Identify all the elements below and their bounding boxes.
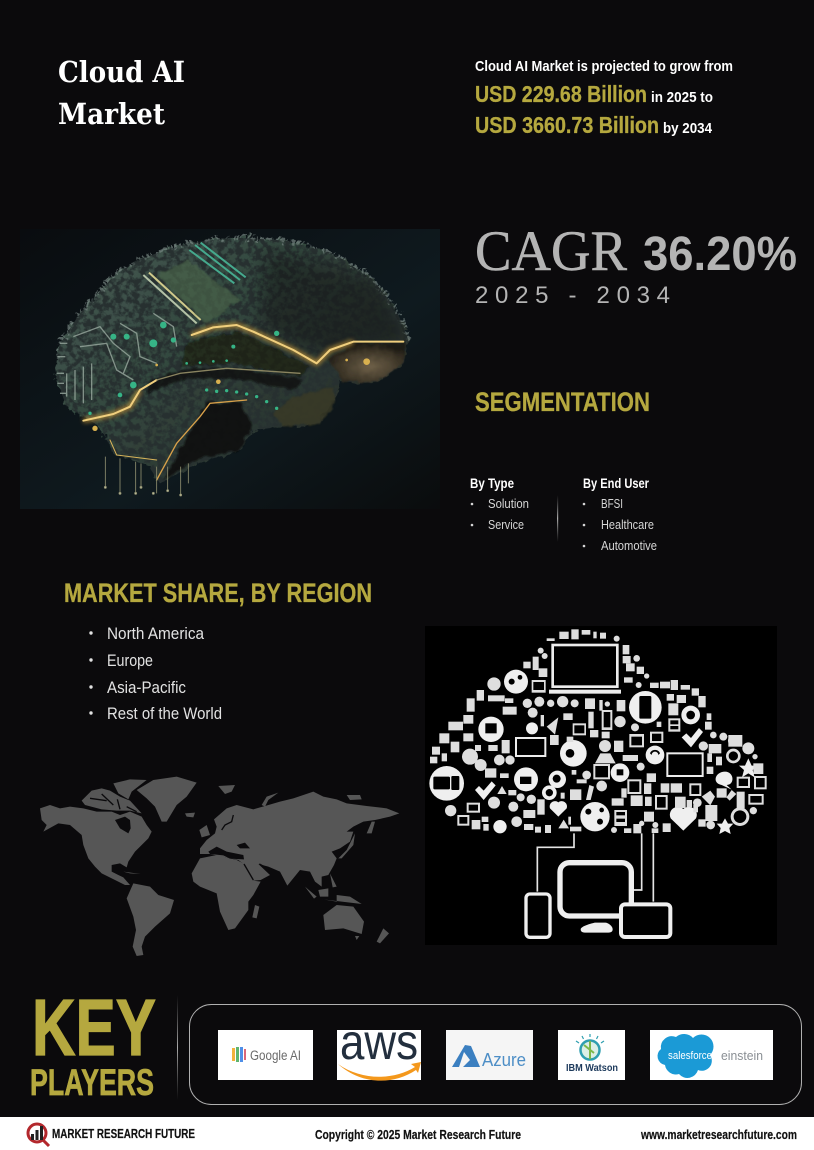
eurasia bbox=[200, 792, 399, 887]
segment column: by end user: Healthcare bbox=[601, 518, 654, 532]
market projection text: USD 229.68 Billion bbox=[475, 81, 647, 107]
europe asia africa oceania bbox=[192, 785, 399, 943]
key players heading: PLAYERS bbox=[30, 1062, 154, 1103]
baltic and red sea bbox=[222, 815, 269, 880]
logo: azure bbox=[446, 1030, 533, 1080]
footer bar bbox=[0, 1117, 814, 1150]
key players heading bbox=[30, 983, 156, 1103]
new zealand bbox=[377, 928, 389, 943]
greenland bbox=[137, 777, 197, 822]
footer brand: MARKET RESEARCH FUTURE bbox=[52, 1126, 195, 1141]
segment divider bbox=[557, 495, 558, 542]
green nodes bbox=[88, 322, 279, 415]
tile inner cut-outs bbox=[459, 682, 765, 824]
market share heading: MARKET SHARE, BY REGION bbox=[64, 578, 372, 608]
screens bbox=[516, 738, 703, 776]
iceland bbox=[185, 813, 195, 817]
segment column: by end user: BFSI bbox=[601, 497, 623, 511]
cerebellum bulb bbox=[328, 343, 405, 382]
segment column: by end user: Automotive bbox=[601, 539, 657, 553]
segmentation heading: SEGMENTATION bbox=[475, 387, 650, 417]
logo: google ai: Google AI bbox=[250, 1048, 301, 1063]
north america bbox=[40, 805, 152, 885]
laptop bbox=[549, 645, 621, 693]
hanging wires bbox=[104, 457, 188, 496]
region list bbox=[89, 625, 222, 723]
circle icon glyphs bbox=[433, 675, 695, 825]
brain image bbox=[20, 229, 440, 509]
footer logo icon bbox=[28, 1124, 49, 1146]
segment column: by type: Solution bbox=[488, 497, 529, 511]
lower bulb bbox=[273, 387, 335, 427]
left circuit traces bbox=[57, 313, 177, 403]
japan bbox=[338, 833, 355, 858]
CAGR figure: 36.20% bbox=[643, 228, 797, 281]
logo: aws: aws bbox=[340, 1014, 418, 1070]
americas and greenland bbox=[40, 777, 197, 956]
region list: Rest of the World bbox=[107, 705, 222, 723]
hearts and checks bbox=[475, 728, 758, 834]
devices bbox=[526, 863, 670, 937]
market projection text: in 2025 to bbox=[651, 89, 713, 106]
teal circuit stripes bbox=[143, 243, 246, 323]
gold glow bbox=[83, 325, 353, 421]
segment column: by end user: By End User bbox=[583, 476, 650, 491]
gold nodes bbox=[92, 358, 370, 431]
monitor stand bbox=[581, 923, 613, 933]
segment column: by type bbox=[470, 476, 529, 532]
connector lines bbox=[537, 833, 653, 902]
australia bbox=[323, 905, 364, 934]
title: Market bbox=[58, 97, 166, 131]
brain texture bbox=[50, 233, 417, 487]
tasmania bbox=[355, 936, 359, 940]
south america bbox=[127, 883, 174, 956]
lower brain dark areas bbox=[147, 332, 310, 480]
africa bbox=[192, 855, 261, 930]
caribbean islands bbox=[123, 872, 141, 874]
black sea bbox=[237, 843, 250, 848]
britain bbox=[199, 825, 210, 837]
circuit board panel bbox=[157, 260, 240, 323]
cloud icon image bbox=[425, 626, 777, 945]
segment column: by end user bbox=[583, 476, 657, 553]
market projection text: Cloud AI Market is projected to grow from bbox=[475, 58, 733, 75]
segment column: by type: By Type bbox=[470, 476, 514, 491]
hudson bay bbox=[115, 817, 131, 833]
mediterranean bbox=[208, 847, 244, 859]
logo: azure: Azure bbox=[482, 1050, 526, 1070]
CAGR figure: CAGR bbox=[475, 220, 627, 283]
logo: ibm watson bbox=[558, 1030, 625, 1080]
arctic archipelago bbox=[82, 779, 147, 813]
logo: ibm watson: IBM Watson bbox=[566, 1063, 618, 1074]
key players divider bbox=[177, 995, 178, 1100]
logo: salesforce einstein: salesforce bbox=[668, 1050, 712, 1062]
gold glowing lines bbox=[83, 325, 403, 480]
large circle icons bbox=[429, 670, 700, 833]
segment column: by type: Service bbox=[488, 518, 524, 532]
world map bbox=[40, 777, 399, 956]
southeast asia islands bbox=[305, 873, 362, 904]
northern islands bbox=[218, 785, 362, 807]
market projection text bbox=[475, 58, 733, 138]
kamchatka bbox=[367, 822, 375, 833]
right side shading bbox=[260, 250, 408, 353]
logo: google ai bbox=[218, 1030, 313, 1080]
footer copyright: Copyright © 2025 Market Research Future bbox=[315, 1127, 521, 1142]
brain fuzzy edge bbox=[57, 237, 408, 357]
region list: North America bbox=[107, 625, 205, 643]
logo: salesforce einstein: einstein bbox=[721, 1048, 763, 1063]
CAGR figure: 2025 - 2034 bbox=[475, 282, 670, 309]
logo: salesforce einstein bbox=[650, 1030, 773, 1080]
region list: Europe bbox=[107, 652, 153, 670]
arctic channels bbox=[90, 794, 137, 812]
title: Cloud AI bbox=[58, 55, 185, 89]
madagascar bbox=[252, 905, 259, 918]
market projection text: USD 3660.73 Billion bbox=[475, 112, 659, 138]
market projection text: by 2034 bbox=[663, 120, 713, 137]
logo panel bbox=[190, 1004, 802, 1104]
small icon tiles bbox=[430, 629, 767, 833]
title bbox=[58, 55, 185, 131]
key players heading: KEY bbox=[32, 983, 156, 1072]
region list: Asia-Pacific bbox=[107, 679, 186, 697]
brain silhouette bbox=[57, 237, 408, 483]
CAGR figure bbox=[475, 220, 797, 309]
